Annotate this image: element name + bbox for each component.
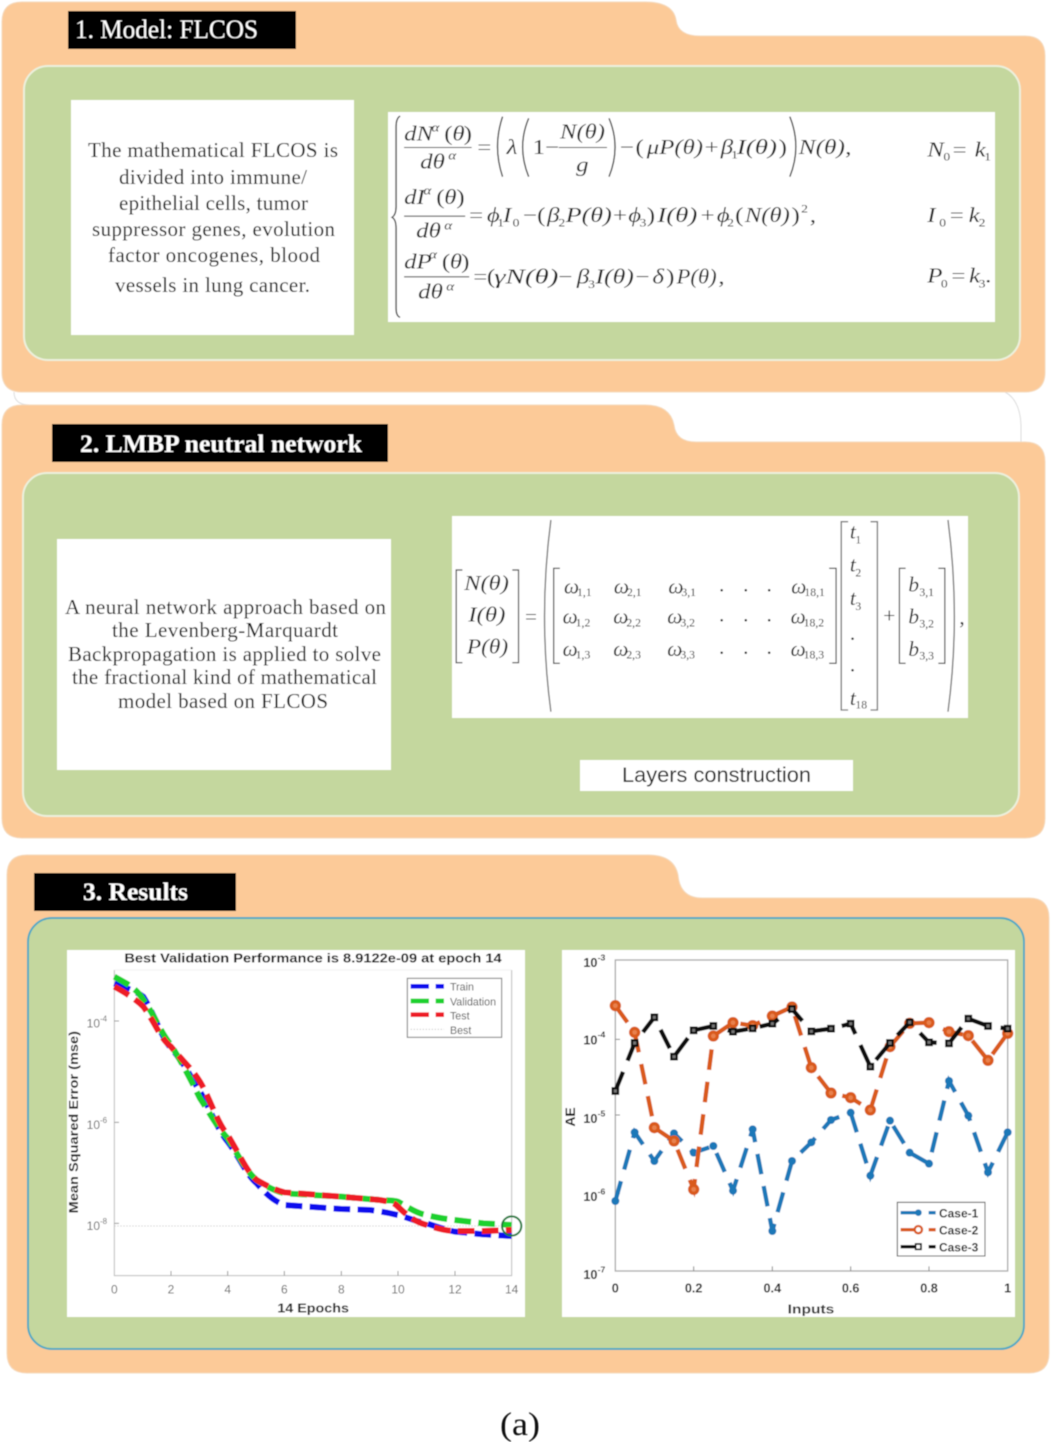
weight matrix: . xyxy=(743,603,748,627)
heading: 3. Results: 3. Results xyxy=(83,879,188,906)
y tick labels: -7 xyxy=(598,1264,606,1274)
eq row 3: I(θ) xyxy=(594,265,634,288)
weight matrix: ω xyxy=(668,575,683,598)
input vector: t xyxy=(850,686,857,710)
eq row 2: P(θ) xyxy=(564,204,612,227)
y tick labels: 10 xyxy=(583,1268,597,1282)
y axis label: AE xyxy=(562,1107,578,1127)
input vector: 1 xyxy=(855,534,861,546)
series: Case-1 xyxy=(611,1077,1012,1235)
best point marker xyxy=(502,1216,521,1236)
weight matrix: . xyxy=(766,603,772,627)
eq row 2: ) xyxy=(647,204,655,227)
text block: LMBP description: A neural network approach based on xyxy=(65,595,386,619)
eq row 3: P(θ) xyxy=(676,265,717,288)
weight matrix: 2,1 xyxy=(627,587,642,599)
eq row 1: k xyxy=(975,139,987,161)
eq row 2: ( xyxy=(436,186,445,209)
caption: (a) xyxy=(500,1407,540,1442)
eq row 1: N(θ) xyxy=(798,136,845,159)
x tick labels: 0.4 xyxy=(764,1281,781,1295)
eq row 1: ) xyxy=(779,136,787,159)
series: train xyxy=(114,983,512,1236)
y tick labels: -6 xyxy=(598,1186,606,1196)
eq row 1: g xyxy=(576,154,589,176)
eq row 2: N(θ) xyxy=(744,204,790,227)
eq row 1: N(θ) xyxy=(559,120,605,143)
weight matrix: . xyxy=(719,635,724,659)
weight matrix: 3,3 xyxy=(680,650,695,662)
eq row 3: ) xyxy=(461,250,469,273)
eq row 2: = xyxy=(469,204,483,227)
x tick labels: 6 xyxy=(281,1283,288,1297)
x axis label: Inputs xyxy=(788,1301,834,1316)
heading: 2. LMBP neural network: 2. LMBP neutral network xyxy=(80,431,362,458)
eq row 2: 1 xyxy=(497,217,504,229)
x tick labels: 0.6 xyxy=(842,1281,859,1295)
x tick labels: 0 xyxy=(612,1281,619,1295)
y tick labels xyxy=(87,1015,108,1233)
x tick labels: 12 xyxy=(448,1283,462,1297)
x tick labels: 10 xyxy=(391,1283,405,1297)
eq row 3: θ xyxy=(450,250,462,273)
eq row 3: = xyxy=(473,265,487,288)
eq row 3: − xyxy=(558,265,572,288)
label: Layers construction xyxy=(580,760,853,791)
legend: Case-1 xyxy=(939,1206,979,1220)
eq row 3: γN(θ) xyxy=(494,265,558,288)
eq row 2: ϕ xyxy=(487,204,500,227)
y tick labels: -6 xyxy=(100,1116,108,1125)
panel: 1. Model FLCOS xyxy=(2,2,1045,392)
legend: Validation xyxy=(450,996,496,1008)
eq row 1: I(θ) xyxy=(736,136,777,159)
text block: LMBP description: the fractional kind of mathematical xyxy=(72,665,377,689)
eq row 3: dθ xyxy=(418,281,443,303)
eq row 2: α xyxy=(444,219,453,233)
y tick labels: 10 xyxy=(583,1112,597,1126)
equations: layer construction matrix: + xyxy=(883,604,895,628)
text block: LMBP description: Backpropagation is applied to solve xyxy=(68,642,381,666)
eq row 2: , xyxy=(810,204,816,227)
eq row 1: λ xyxy=(505,136,517,159)
equations: layer construction matrix: , xyxy=(959,605,965,629)
y tick labels: 10 xyxy=(583,956,597,970)
text block: FLCOS description: factor oncogenes, blood xyxy=(108,243,320,267)
eq row 3: α xyxy=(429,249,438,262)
bias vector: b xyxy=(908,637,919,661)
x tick labels: 0 xyxy=(111,1283,118,1297)
eq row 2: I(θ) xyxy=(656,204,697,227)
weight matrix: 3,2 xyxy=(680,618,695,630)
x tick labels: 0.2 xyxy=(685,1281,702,1295)
output vector: I(θ) xyxy=(467,603,505,627)
eq row 1: 0 xyxy=(943,151,950,163)
eq row 3: 0 xyxy=(941,277,948,290)
inner green panel xyxy=(28,918,1024,1349)
eq row 2: dθ xyxy=(416,219,441,242)
eq row 2: + xyxy=(701,204,715,227)
eq row 3: , xyxy=(718,265,725,288)
y tick labels xyxy=(583,952,606,1282)
x tick labels: 14 xyxy=(505,1283,519,1297)
eq row 1: dθ xyxy=(420,150,445,173)
text block: LMBP description xyxy=(57,539,391,770)
eq row 3: β xyxy=(576,265,590,288)
eq row 3: P xyxy=(926,265,942,287)
x tick labels: 2 xyxy=(168,1283,175,1297)
inner green panel xyxy=(23,473,1019,816)
y tick labels: -3 xyxy=(598,952,606,962)
eq row 3: dP xyxy=(404,250,432,273)
bias vector: b xyxy=(908,573,919,597)
eq row 2: 3 xyxy=(640,217,646,229)
chart: validation performance xyxy=(67,950,525,1317)
weight matrix: . xyxy=(743,573,748,597)
input vector: 2 xyxy=(855,568,861,580)
weight matrix: 2,3 xyxy=(626,650,641,662)
weight matrix: ω xyxy=(791,637,806,661)
eq row 1: 1 xyxy=(984,151,991,163)
series: Case-2 xyxy=(611,1002,1012,1193)
input vector: 18 xyxy=(855,700,867,712)
weight matrix: 2,2 xyxy=(626,618,641,630)
equations: layer construction matrix xyxy=(452,516,968,718)
weight matrix: ω xyxy=(667,637,682,661)
text block: LMBP description: the Levenberg-Marquardt xyxy=(112,618,338,642)
y axis label: Mean Squared Error (mse) xyxy=(67,1031,81,1213)
weight matrix: . xyxy=(719,603,724,627)
eq row 3: = xyxy=(951,265,965,287)
eq row 3: . xyxy=(985,265,991,287)
x tick labels: 1 xyxy=(1004,1281,1011,1295)
bias vector: 3,3 xyxy=(919,650,934,662)
y tick labels: 10 xyxy=(87,1017,100,1031)
eq row 2: 2 xyxy=(558,217,565,229)
weight matrix: . xyxy=(719,573,724,597)
weight matrix xyxy=(554,568,836,663)
eq row 2: ϕ xyxy=(717,204,730,227)
eq row 1: α xyxy=(431,121,440,135)
equations: layer construction matrix: = xyxy=(525,605,537,628)
chart: absolute error xyxy=(562,950,1015,1317)
equations: FLCOS system xyxy=(388,112,995,322)
eq row 1: ) xyxy=(464,123,472,145)
weight matrix: . xyxy=(766,635,772,659)
x axis label: 14 Epochs xyxy=(277,1301,349,1315)
weight matrix: ω xyxy=(791,605,806,628)
eq row 2: = xyxy=(950,204,964,227)
eq row 3 xyxy=(404,249,991,303)
eq row 2: + xyxy=(613,204,627,227)
legend: Train xyxy=(450,982,474,994)
y tick labels: -4 xyxy=(100,1015,108,1024)
eq row 1: α xyxy=(448,149,457,163)
weight matrix: ω xyxy=(564,575,579,598)
weight matrix: ω xyxy=(791,575,806,598)
input vector: 3 xyxy=(855,601,861,613)
eq row 1: ( xyxy=(636,136,644,159)
heading: 2. LMBP neural network xyxy=(52,424,388,462)
eq row 3: ) xyxy=(666,265,674,288)
heading: 1. Model FLCOS xyxy=(68,11,296,49)
text block: LMBP description: model based on FLCOS xyxy=(118,689,328,713)
eq row 1: θ xyxy=(452,123,465,145)
eq row 2: ) xyxy=(456,186,465,209)
bias vector: 3,1 xyxy=(919,587,934,599)
eq row 1: − xyxy=(620,136,634,159)
eq row 2: 2 xyxy=(979,217,986,229)
x tick labels: 8 xyxy=(338,1283,345,1297)
x tick labels xyxy=(612,1281,1011,1295)
series: validation xyxy=(114,977,512,1225)
weight matrix: 1,3 xyxy=(576,650,591,662)
bias vector xyxy=(899,568,945,663)
text block: FLCOS description xyxy=(71,100,354,335)
eq row 2: 0 xyxy=(513,217,519,229)
y tick labels: -4 xyxy=(598,1030,606,1040)
legend xyxy=(407,978,502,1037)
eq row 1: 1 xyxy=(731,149,738,161)
x tick labels: 4 xyxy=(224,1283,231,1297)
y tick labels: -8 xyxy=(100,1217,108,1226)
legend xyxy=(897,1202,985,1256)
weight matrix: . xyxy=(743,635,748,659)
eq row 1: β xyxy=(720,136,734,159)
eq row 2: ϕ xyxy=(628,204,641,227)
x tick labels: 0.8 xyxy=(920,1281,938,1295)
eq row 3: k xyxy=(969,265,981,287)
bias vector: b xyxy=(908,605,919,628)
weight matrix: 18,2 xyxy=(804,618,824,630)
input vector: t xyxy=(850,586,857,610)
text block: FLCOS description: suppressor genes, evolution xyxy=(92,217,336,241)
panel: 3. Results xyxy=(7,855,1049,1373)
eq row 1: μP(θ) xyxy=(646,136,703,159)
eq row 3: ( xyxy=(442,250,450,273)
y tick labels: 10 xyxy=(87,1118,100,1132)
eq row 2: dI xyxy=(404,186,426,209)
label: Layers construction: Layers construction xyxy=(622,764,811,787)
eq row 2: I xyxy=(502,204,513,227)
weight matrix: 1,2 xyxy=(576,618,591,630)
eq row 2: 2 xyxy=(727,217,734,229)
y tick labels: 10 xyxy=(583,1033,597,1047)
input vector xyxy=(841,520,877,712)
text block: FLCOS description: divided into immune/ xyxy=(119,165,307,189)
eq row 3: − xyxy=(636,265,650,288)
weight matrix: 18,1 xyxy=(804,587,825,599)
input vector: t xyxy=(850,520,857,543)
weight matrix: ω xyxy=(667,605,682,628)
legend: Case-2 xyxy=(939,1223,979,1237)
eq row 2: 2 xyxy=(801,203,808,215)
text block: FLCOS description: vessels in lung cancer. xyxy=(115,273,310,297)
legend: Best xyxy=(450,1025,471,1037)
eq row 1 xyxy=(404,117,991,177)
weight matrix: 3,1 xyxy=(681,587,696,599)
eq row 2: −( xyxy=(523,204,545,227)
eq row 1: = xyxy=(477,136,491,159)
panel: 2. LMBP neural network xyxy=(2,405,1045,838)
eq row 2: ) xyxy=(791,204,800,227)
eq row 3: 3 xyxy=(588,278,595,291)
weight matrix: ω xyxy=(613,605,628,628)
series: Case-3 xyxy=(613,1006,1010,1094)
y tick labels: -5 xyxy=(598,1108,606,1118)
heading: 1. Model FLCOS: 1. Model: FLCOS xyxy=(75,15,258,44)
weight matrix: ω xyxy=(613,637,628,661)
eq row 1: ( xyxy=(444,123,453,145)
weight matrix: ω xyxy=(563,605,578,628)
eq row 2: β xyxy=(546,204,560,227)
weight matrix: . xyxy=(766,573,772,597)
output vector: P(θ) xyxy=(466,635,508,658)
eq row 3: α xyxy=(446,281,455,294)
eq row 2: θ xyxy=(444,186,457,209)
eq row 3: 3 xyxy=(979,277,986,290)
output vector: N(θ) xyxy=(463,571,509,595)
eq row 1: + xyxy=(705,136,719,159)
eq row 2 xyxy=(404,185,986,242)
eq row 2: 0 xyxy=(939,217,946,229)
input vector: . xyxy=(850,621,855,645)
weight matrix: 18,3 xyxy=(804,650,824,662)
input vector: . xyxy=(850,653,855,677)
eq row 1: , xyxy=(845,136,852,159)
chart title: Best Validation Performance is 8.9122e-09 at epoch 14 xyxy=(124,950,502,965)
eq row 1: = xyxy=(953,139,967,161)
bias vector: 3,2 xyxy=(919,618,934,630)
y tick labels: 10 xyxy=(583,1190,597,1204)
legend: Case-3 xyxy=(939,1241,979,1255)
legend: Test xyxy=(450,1011,470,1023)
eq row 2: ( xyxy=(735,204,743,227)
eq row 3: ( xyxy=(487,265,495,288)
series: test xyxy=(114,987,512,1231)
text block: FLCOS description: The mathematical FLCOS is xyxy=(88,138,338,162)
eq row 1: N xyxy=(926,139,946,161)
inner green panel xyxy=(24,66,1020,360)
eq row 1: dN xyxy=(404,123,435,145)
text block: FLCOS description: epithelial cells, tumor xyxy=(119,191,308,215)
weight matrix: ω xyxy=(614,575,629,598)
x tick labels xyxy=(111,1283,519,1297)
eq row 2: α xyxy=(423,185,432,198)
eq row 2: I xyxy=(926,204,937,227)
eq row 3: δ xyxy=(652,265,664,288)
eq row 1: 1− xyxy=(533,136,559,159)
output vector xyxy=(456,570,519,663)
heading: 3. Results xyxy=(34,873,236,911)
input vector: t xyxy=(850,553,857,577)
weight matrix: ω xyxy=(563,637,578,661)
weight matrix: 1,1 xyxy=(577,587,592,599)
y tick labels: 10 xyxy=(87,1219,100,1233)
eq row 2: k xyxy=(969,204,981,227)
